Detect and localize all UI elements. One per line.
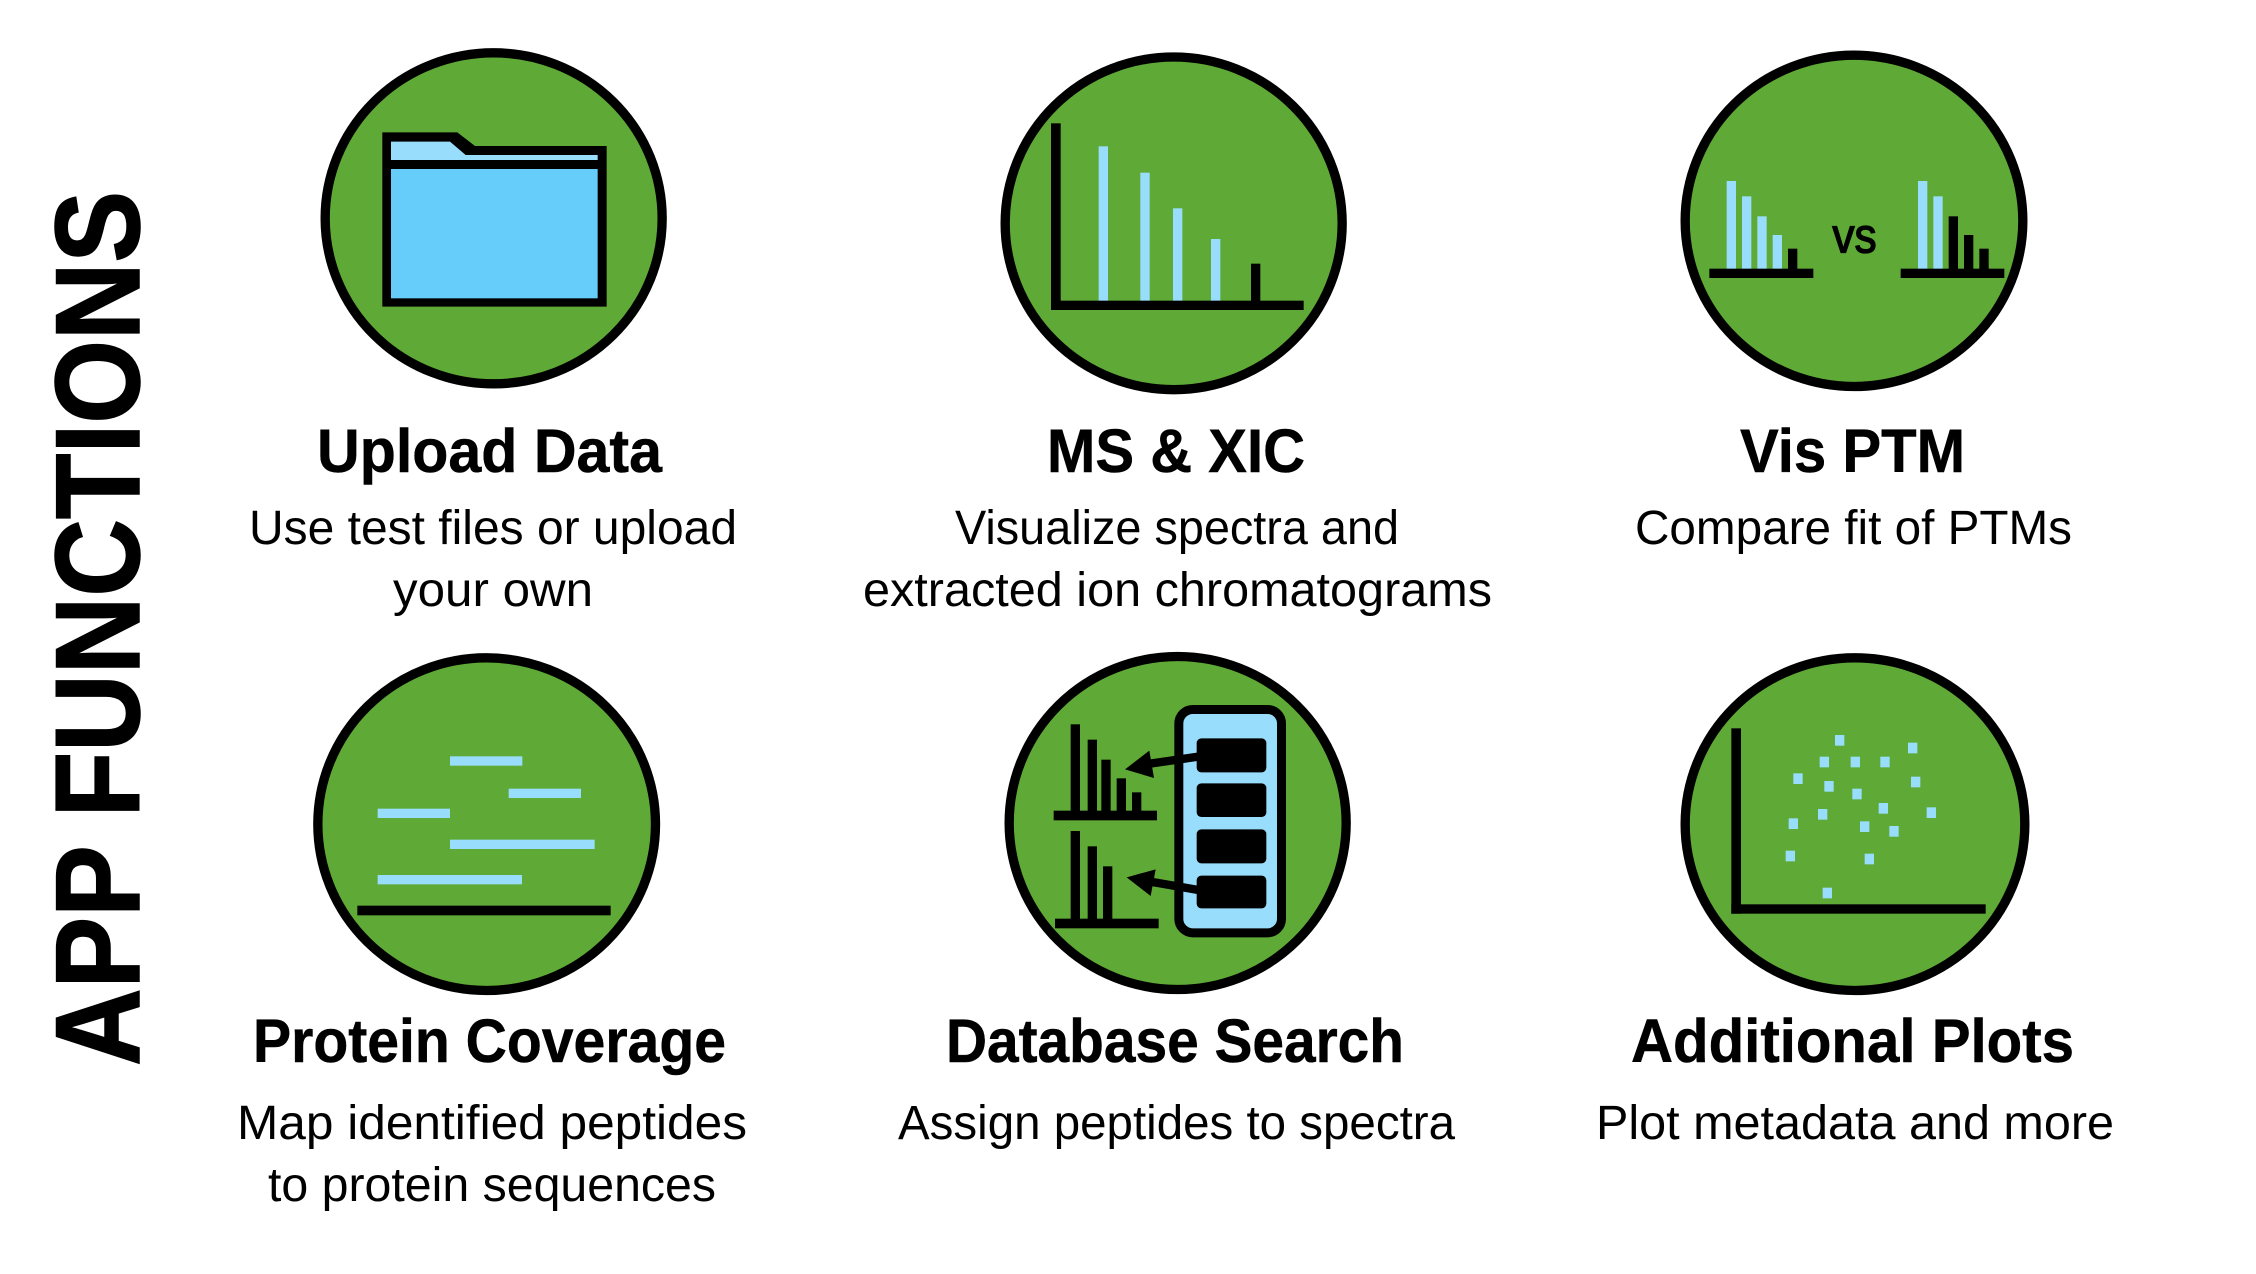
icon: peptide coverage bars in green circle [318, 658, 655, 990]
panel: Additional Plots [1596, 658, 2114, 1150]
description: MS & XIC: extracted ion chromatograms [863, 564, 1492, 617]
description: Upload Data: Use test files or upload [249, 502, 737, 555]
icon: mass spectrum chart in green circle [1005, 57, 1342, 390]
heading: Upload Data: Upload Data [317, 417, 663, 485]
description: Upload Data [249, 502, 737, 617]
panel: Upload Data [249, 53, 737, 617]
description: Database Search: Assign peptides to spectra [898, 1097, 1455, 1150]
description: Protein Coverage: to protein sequences [268, 1159, 716, 1212]
panel: Vis PTM [1635, 55, 2072, 555]
description: Protein Coverage: Map identified peptides [237, 1097, 747, 1150]
panel: MS & XIC [863, 57, 1492, 617]
icon: folder in green circle [325, 53, 662, 384]
heading: Additional Plots: Additional Plots [1631, 1007, 2074, 1075]
description: Vis PTM: Compare fit of PTMs [1635, 502, 2072, 555]
description: Protein Coverage [237, 1097, 747, 1212]
heading: MS & XIC: MS & XIC [1047, 417, 1305, 485]
title: APP FUNCTIONS: APP FUNCTIONS [31, 191, 165, 1066]
description: MS & XIC: Visualize spectra and [955, 502, 1399, 555]
heading: Vis PTM: Vis PTM [1740, 417, 1965, 485]
icon: database matched to spectra in green circle [1009, 656, 1346, 989]
icon: scatter plot in green circle [1685, 658, 2025, 990]
description: Upload Data: your own [393, 564, 593, 617]
icon: two spectra compared in green circle [1685, 55, 2023, 386]
heading: Database Search: Database Search [946, 1007, 1404, 1075]
panel: Database Search [898, 656, 1455, 1150]
description: MS & XIC [863, 502, 1492, 617]
heading: Protein Coverage: Protein Coverage [253, 1007, 726, 1075]
icon: two spectra compared in green circle: vs [1832, 209, 1877, 264]
panel: Protein Coverage [237, 658, 747, 1212]
description: Additional Plots: Plot metadata and more [1596, 1097, 2114, 1150]
